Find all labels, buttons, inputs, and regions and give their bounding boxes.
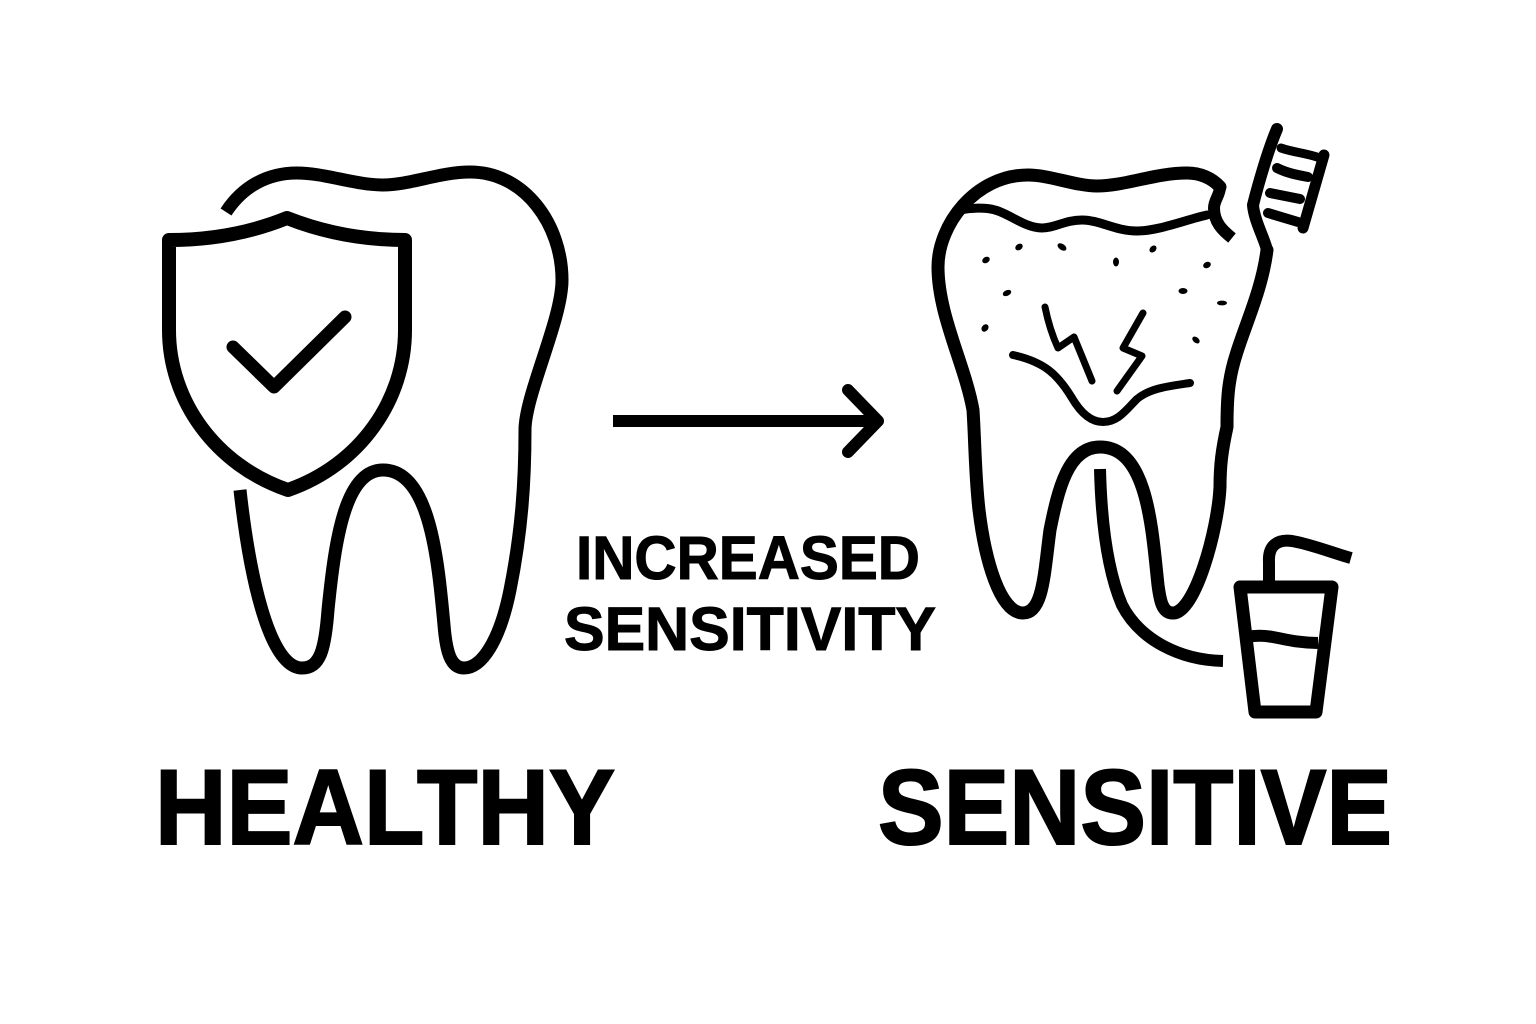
icon: enamel specks <box>980 242 1227 345</box>
icon: enamel edge and gum line <box>960 187 1232 238</box>
heading: sensitive: SENSITIVE <box>878 747 1392 867</box>
icon: shield with check mark <box>169 218 405 490</box>
icon: healthy tooth outline <box>226 172 562 668</box>
heading: healthy: HEALTHY <box>155 747 615 867</box>
label: increased sensitivity: SENSITIVITY <box>564 595 936 663</box>
icon: glass of water with straw <box>1240 541 1351 712</box>
icon: toothbrush <box>1253 129 1324 250</box>
icon: pulp chamber <box>1013 355 1190 422</box>
panel: healthy tooth illustration <box>169 172 562 668</box>
label: increased sensitivity: INCREASED <box>576 524 920 592</box>
icon: lightning cracks <box>1045 307 1143 391</box>
icon: sensitive tooth outline <box>938 173 1267 613</box>
arrow: healthy to sensitive <box>613 390 878 452</box>
icon: nerve root <box>1100 469 1223 661</box>
panel: sensitive tooth illustration <box>938 129 1351 712</box>
label: increased sensitivity <box>564 524 936 663</box>
